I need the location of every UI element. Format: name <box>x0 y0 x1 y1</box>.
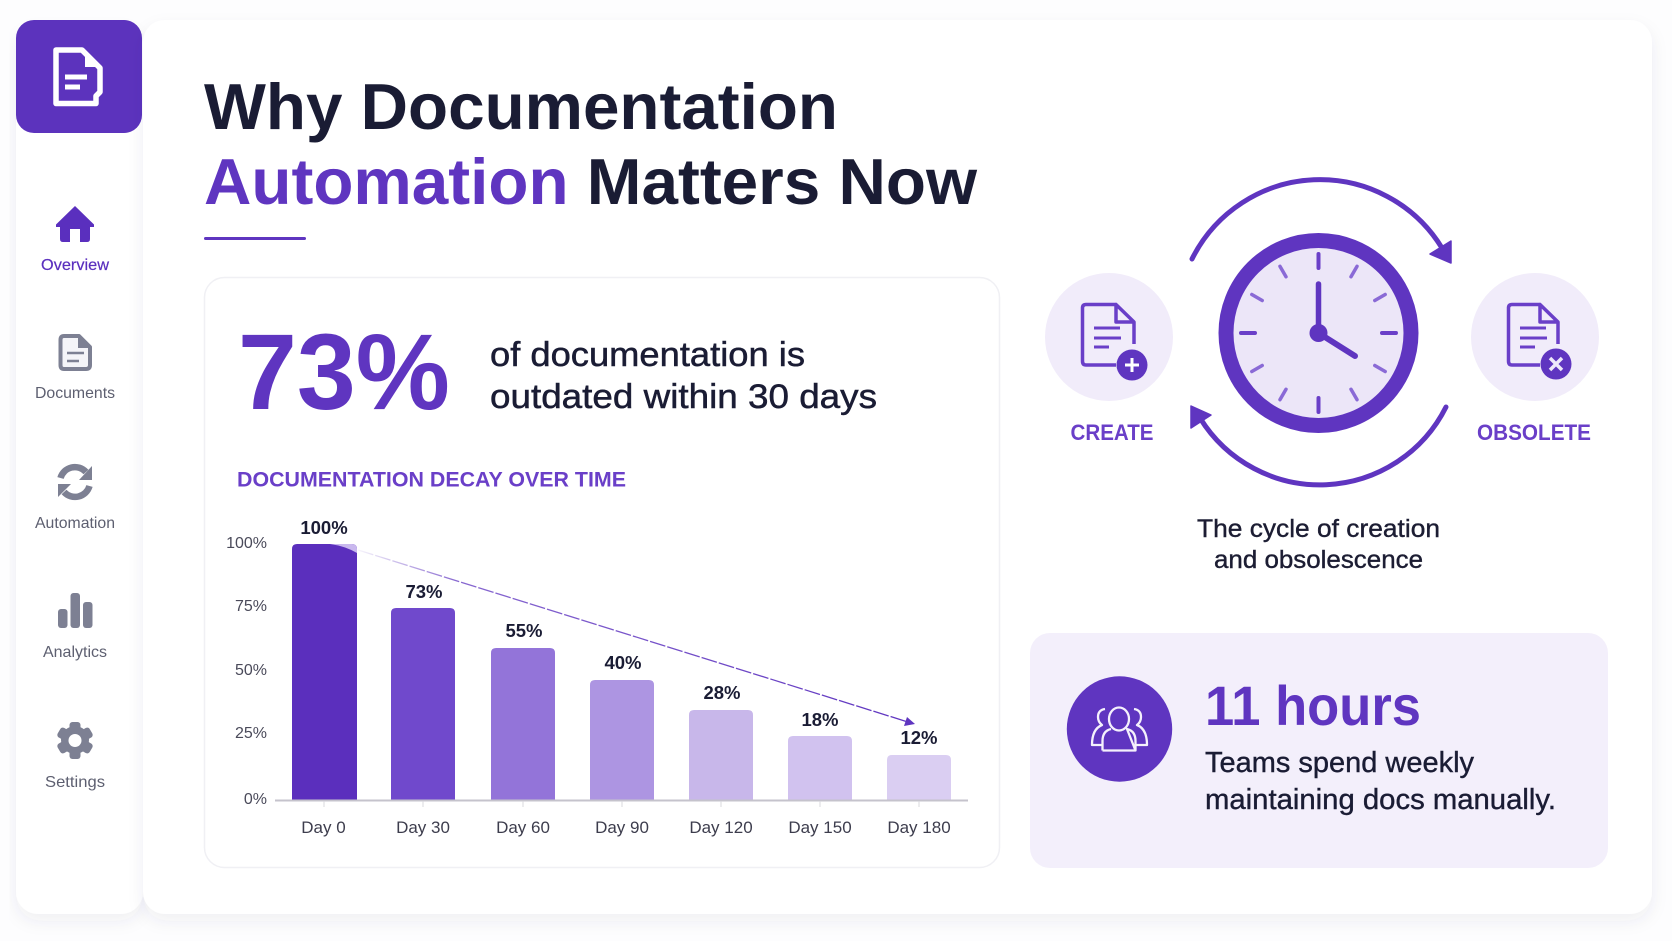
clock <box>1226 240 1411 426</box>
nav item: settings: Settings <box>45 774 105 791</box>
value labels <box>300 517 938 748</box>
y axis labels: 100% <box>226 535 267 552</box>
nav item: analytics: Analytics <box>43 644 107 661</box>
logo tile <box>16 20 142 133</box>
panel: decay statistic and chart <box>204 278 1000 868</box>
title: Why Documentation <box>204 70 838 143</box>
day labels: Day 180 <box>887 818 951 837</box>
value labels: 73% <box>405 581 443 602</box>
day labels: Day 90 <box>595 818 649 837</box>
stat description: outdated within 30 days <box>490 378 877 416</box>
obsolete node: OBSOLETE <box>1477 420 1591 445</box>
big stat: 73%: 73% <box>238 311 450 432</box>
bars <box>292 544 951 800</box>
day labels: Day 0 <box>301 818 346 837</box>
day labels: Day 30 <box>396 818 450 837</box>
y axis labels <box>226 535 267 808</box>
nav item: automation: Automation <box>35 515 115 532</box>
trend arrow <box>358 550 915 726</box>
y axis labels: 75% <box>235 598 267 615</box>
nav item: overview: Overview <box>41 257 109 274</box>
y axis labels: 0% <box>244 791 267 808</box>
panel: sidebar <box>16 20 143 914</box>
create node: CREATE <box>1070 420 1154 445</box>
title <box>204 70 977 218</box>
callout description <box>1205 747 1556 816</box>
cycle caption <box>1197 515 1440 574</box>
callout description: Teams spend weekly <box>1205 747 1474 779</box>
cycle caption: The cycle of creation <box>1197 515 1440 543</box>
nav item: settings <box>45 722 105 791</box>
value labels: 12% <box>900 727 938 748</box>
value labels: 28% <box>703 682 741 703</box>
nav item: analytics <box>43 593 107 661</box>
stat description: of documentation is <box>490 336 805 374</box>
icon: team <box>1067 676 1172 782</box>
arrow: top arc <box>1192 180 1451 263</box>
value labels: 40% <box>604 652 642 673</box>
day labels: Day 60 <box>496 818 550 837</box>
value labels: 18% <box>801 709 839 730</box>
arrow: bottom arc <box>1191 406 1446 485</box>
nav item: documents: Documents <box>35 385 115 402</box>
stat description <box>490 336 877 416</box>
cycle caption: and obsolescence <box>1214 546 1423 574</box>
day labels: Day 120 <box>689 818 753 837</box>
callout: 11 hours <box>1030 633 1608 868</box>
nav item: automation <box>35 466 115 532</box>
diagram: creation and obsolescence cycle <box>1045 180 1599 574</box>
y axis labels: 25% <box>235 725 267 742</box>
day labels <box>301 818 951 837</box>
nav item: documents <box>35 336 115 402</box>
title: Automation Matters Now <box>204 145 977 218</box>
callout description: maintaining docs manually. <box>1205 784 1556 816</box>
bar chart: documentation decay <box>226 517 968 837</box>
value labels: 55% <box>505 620 543 641</box>
day labels: Day 150 <box>788 818 852 837</box>
obsolete node <box>1471 273 1599 445</box>
stat: 11 hours: 11 hours <box>1205 674 1421 737</box>
axis line and ticks <box>275 800 968 802</box>
y axis labels: 50% <box>235 662 267 679</box>
chart heading: DOCUMENTATION DECAY OVER TIME <box>237 468 626 492</box>
nav item: overview <box>41 206 109 274</box>
create node <box>1045 273 1173 445</box>
value labels: 100% <box>300 517 348 538</box>
